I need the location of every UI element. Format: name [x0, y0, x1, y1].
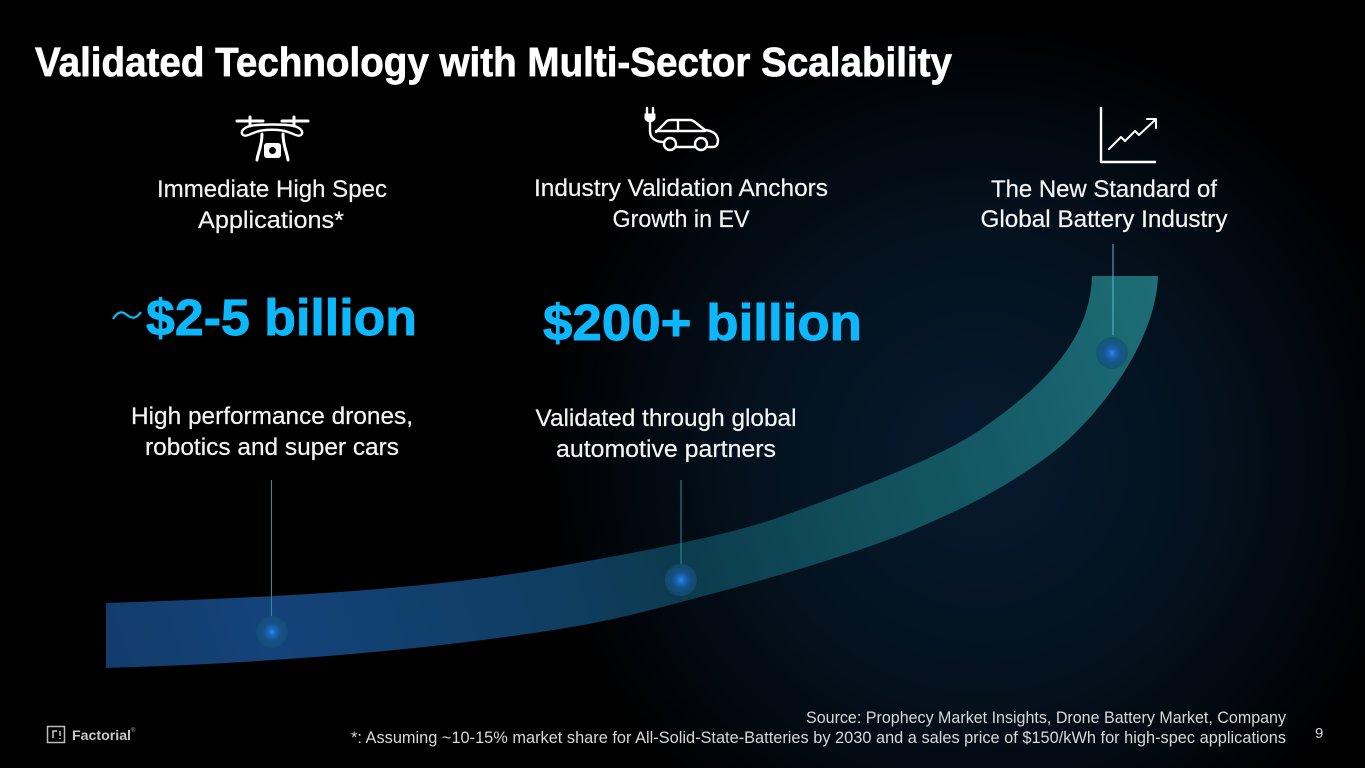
- heading: new standard: Global Battery Industry: [980, 206, 1228, 233]
- text: drones description: High performance drones,: [131, 403, 413, 430]
- marker 3: [1096, 244, 1128, 369]
- heading: industry validation: Growth in EV: [612, 206, 750, 233]
- page number: 9: [1315, 725, 1323, 742]
- text: drones description: [131, 403, 413, 461]
- text: drones description: robotics and super cars: [145, 434, 399, 461]
- heading: new standard: [980, 176, 1228, 233]
- marker 1: [256, 480, 288, 648]
- title: Validated Technology with Multi-Sector Scalability: [35, 39, 952, 85]
- source footnote: Source: Prophecy Market Insights, Drone Battery Market, Company: [806, 709, 1287, 727]
- text: automotive description: Validated through global: [536, 405, 796, 432]
- marker 2: [665, 480, 697, 596]
- logo: Factorial: Factorial: [72, 727, 131, 743]
- text: automotive description: automotive partners: [556, 436, 776, 463]
- heading: new standard: The New Standard of: [991, 176, 1217, 203]
- heading: immediate high spec applications: Applications*: [198, 207, 344, 234]
- icon: growth chart: [1101, 107, 1156, 162]
- source footnote: *: Assuming ~10-15% market share for All-Solid-State-Batteries by 2030 and a sales price of $150/kWh for high-spec applications: [351, 729, 1286, 747]
- text: automotive description: [536, 405, 796, 463]
- growth curve band: [106, 276, 1158, 668]
- heading: immediate high spec applications: Immediate High Spec: [157, 176, 387, 203]
- heading: immediate high spec applications: [157, 176, 387, 234]
- figure: 2-5 billion: $2-5 billion: [146, 289, 417, 346]
- logo: Factorial: ®: [131, 727, 136, 734]
- icon: drone: [237, 117, 308, 160]
- heading: industry validation: [534, 175, 828, 233]
- source footnote: [351, 709, 1287, 747]
- figure: 200+ billion: $200+ billion: [543, 294, 862, 351]
- heading: industry validation: Industry Validation Anchors: [534, 175, 828, 202]
- icon: electric car: [645, 108, 718, 150]
- logo: Factorial: [48, 726, 136, 743]
